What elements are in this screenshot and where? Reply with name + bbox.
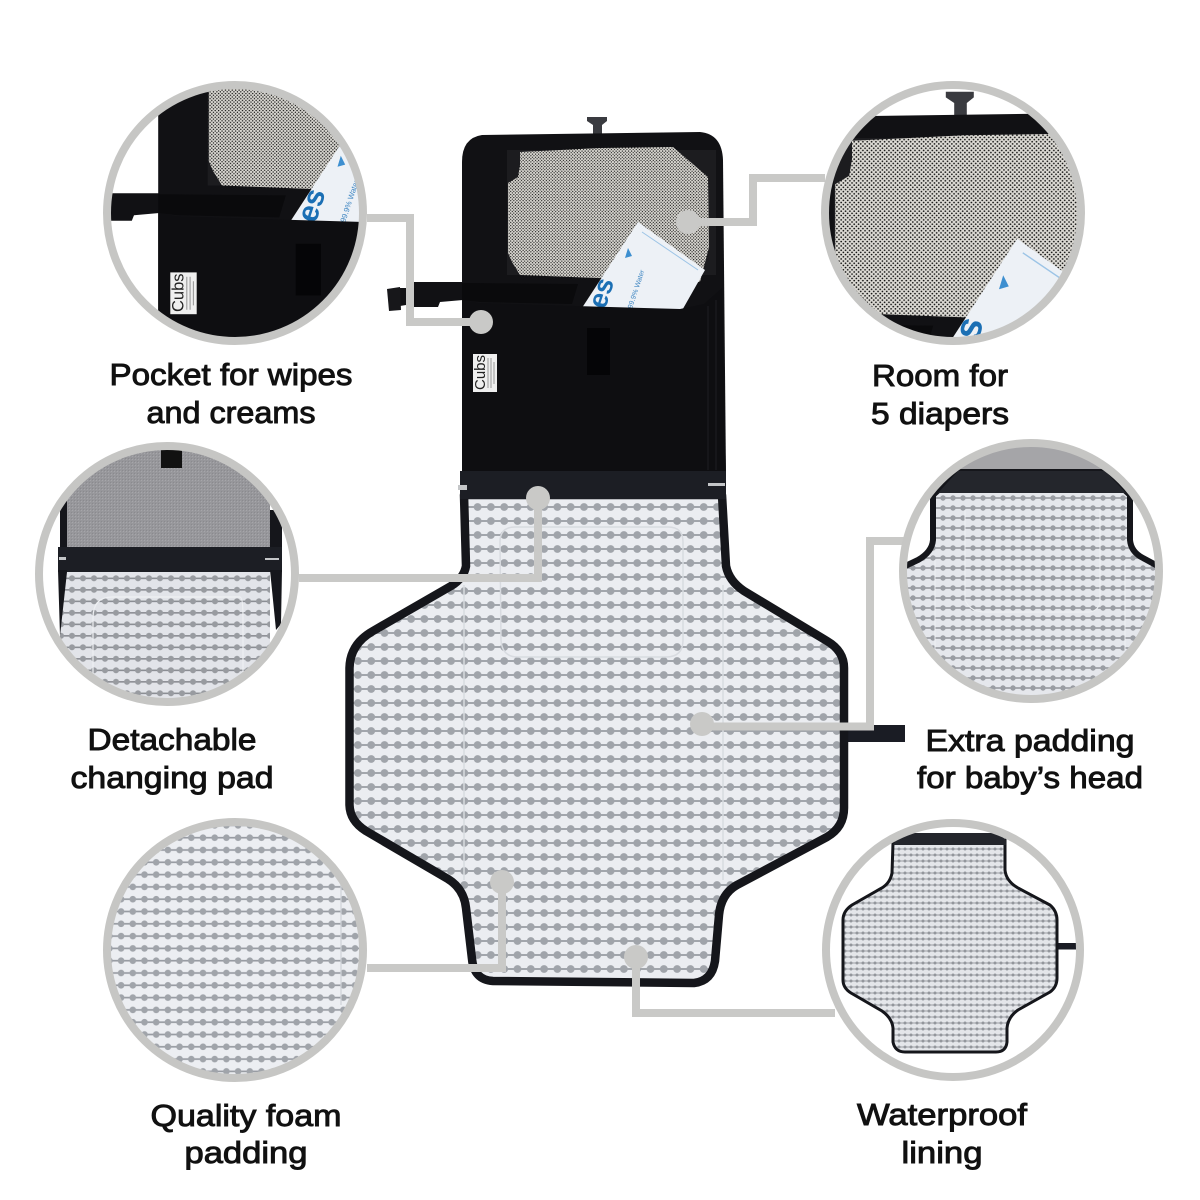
panel: extra padding for baby's head [897,440,1165,720]
panel: room for 5 diapers [821,81,1085,345]
zoomed zip photo [58,450,282,698]
label: foam padding: Quality foam [150,1098,342,1133]
ring [107,822,363,1078]
label: pocket [110,357,352,430]
bag flap with mesh and wipes pocket [387,117,726,477]
label: detachable: Detachable [88,722,256,757]
label: diapers: 5 diapers [871,396,1009,431]
label: pocket: Pocket for wipes [110,357,352,392]
mini full pad [843,840,1057,1052]
label: extra padding: for baby’s head [917,760,1143,795]
ring [39,446,295,702]
label: waterproof: lining [902,1135,982,1170]
label: foam padding: padding [184,1135,308,1170]
label: waterproof [857,1097,1027,1170]
ring [903,443,1159,699]
label: diapers: Room for [872,358,1008,393]
zoomed pocket photo: Cubs [169,273,187,312]
zoomed pocket photo: es [291,185,332,226]
label: detachable: changing pad [70,760,274,795]
label: extra padding [917,723,1143,795]
zoomed head padding photo [907,447,1155,695]
mini pad top band [893,833,1006,845]
label: waterproof: Waterproof [857,1097,1027,1132]
zoomed pocket photo [111,89,359,337]
pad stitching seams [464,527,723,880]
label: pocket: and creams [146,395,316,430]
Cubs brand label: Cubs [472,355,489,390]
ring [825,85,1081,341]
zoomed foam print [111,826,359,1074]
panel: waterproof lining [826,823,1080,1077]
connector: waterproof lining [624,945,835,1013]
label: foam padding [150,1098,342,1170]
ring [826,823,1080,1077]
panel: pocket for wipes and creams [103,81,367,345]
label: extra padding: Extra padding [926,723,1134,758]
zoomed pocket photo: 99.9% Water [339,178,361,224]
mini pad strap [1056,943,1077,950]
wipes packet fine print: 99.9% Water [627,269,647,310]
zoomed mesh pocket photo: es [940,312,993,365]
connector: room for diapers [676,178,825,234]
connector: extra padding [690,541,905,736]
label: diapers [871,358,1009,431]
panel: detachable changing pad [39,440,295,730]
connector: pocket [367,218,493,334]
zoomed mesh pocket photo [829,92,1077,337]
connector: detachable pad [299,486,550,578]
label: detachable [70,722,274,795]
zip band joining flap and pad [460,471,726,499]
zip pulls [458,483,725,490]
connector: foam padding [367,870,514,968]
ring [107,85,363,341]
product: unfolded changing pad [350,117,905,983]
panel: quality foam padding [100,815,370,1085]
wipes packet wording: es [582,274,620,312]
strap on the side of the pad [845,725,905,742]
pad body with dotted print [350,495,844,983]
